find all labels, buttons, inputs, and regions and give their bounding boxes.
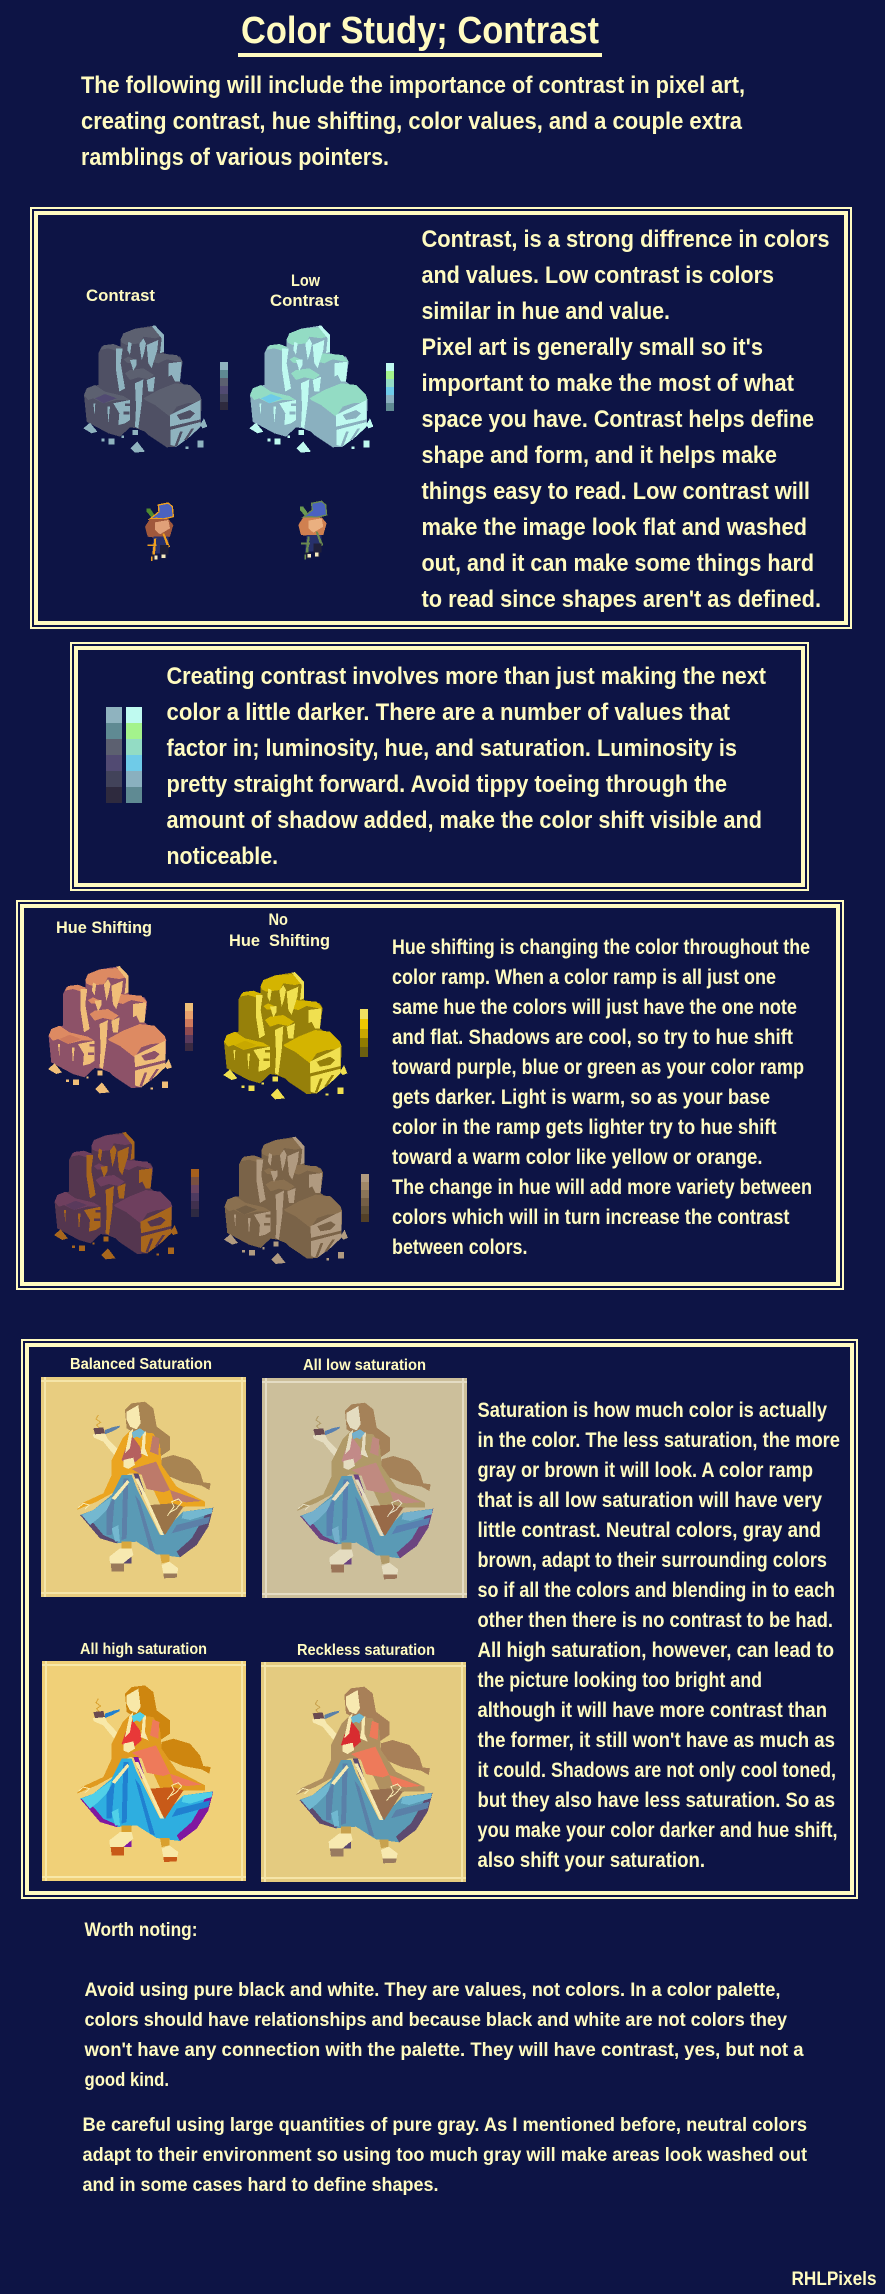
contrast explanation text: out, and it can make some things hard xyxy=(422,550,814,577)
contrast explanation text: Contrast, is a strong diffrence in colors xyxy=(422,226,830,253)
hue shifting text xyxy=(392,936,812,1259)
credit: RHLPixels xyxy=(792,2269,876,2290)
creating contrast text: factor in; luminosity, hue, and saturation. Luminosity is xyxy=(166,735,737,762)
saturation text: other then there is no contrast to be had. xyxy=(478,1609,833,1632)
hue shifting text: color in the ramp gets lighter try to hue shift xyxy=(392,1116,777,1139)
color ramp: no hue shift brown xyxy=(361,1174,369,1222)
saturation text: that is all low saturation will have very xyxy=(478,1489,822,1512)
hue shifting text: gets darker. Light is warm, so as your base xyxy=(392,1086,770,1109)
saturation text: but they also have less saturation. So as xyxy=(478,1789,835,1812)
character: low contrast xyxy=(298,501,327,559)
hue shifting text: color ramp. When a color ramp is all just one xyxy=(392,966,776,989)
hue shifting text: and flat. Shadows are cool, so try to hue shift xyxy=(392,1026,793,1049)
saturation text xyxy=(478,1399,840,1872)
saturation text: also shift your saturation. xyxy=(478,1849,705,1872)
card: balanced saturation xyxy=(41,1377,246,1597)
hue shifting text: toward a warm color like yellow or orange. xyxy=(392,1146,762,1169)
hue shifting text: same hue the colors will just have the one note xyxy=(392,996,797,1019)
note: pure gray: and in some cases hard to define shapes. xyxy=(82,2175,438,2196)
label: reckless saturation: Reckless saturation xyxy=(297,1642,435,1659)
saturation text: although it will have more contrast than xyxy=(478,1699,827,1722)
note: black and white xyxy=(84,1980,804,2091)
creating contrast text: Creating contrast involves more than just making the next xyxy=(166,663,766,690)
contrast explanation text: similar in hue and value. xyxy=(422,298,670,325)
saturation text: in the color. The less saturation, the more xyxy=(478,1429,840,1452)
saturation text: so if all the colors and blending in to each xyxy=(478,1579,835,1602)
rock: low contrast xyxy=(249,325,373,453)
panel: contrast xyxy=(30,207,852,629)
label: low contrast: Contrast xyxy=(270,291,339,310)
rock: no hue shift brown xyxy=(224,1137,348,1264)
creating contrast text: noticeable. xyxy=(166,843,278,870)
note: black and white: colors should have relationships and because black and white are not colors they xyxy=(84,2010,787,2031)
hue shifting text: toward purple, blue or green as your color ramp xyxy=(392,1056,804,1079)
note: pure gray: adapt to their environment so using too much gray will make areas look washed out xyxy=(82,2145,808,2166)
label: all low saturation: All low saturation xyxy=(303,1357,426,1374)
color ramp: low contrast xyxy=(386,363,394,411)
note: black and white: Avoid using pure black and white. They are values, not colors. In a color palette, xyxy=(84,1980,780,2001)
saturation text: Saturation is how much color is actually xyxy=(478,1399,827,1422)
contrast explanation text: things easy to read. Low contrast will xyxy=(422,478,810,505)
contrast explanation text: make the image look flat and washed xyxy=(422,514,807,541)
note: black and white: good kind. xyxy=(84,2070,169,2091)
card: all low saturation xyxy=(262,1378,467,1598)
contrast explanation text: space you have. Contrast helps define xyxy=(422,406,814,433)
creating contrast text xyxy=(166,663,766,870)
saturation text: gray or brown it will look. A color ramp xyxy=(478,1459,813,1482)
hue shifting text: The change in hue will add more variety between xyxy=(392,1176,812,1199)
contrast explanation text: important to make the most of what xyxy=(422,370,794,397)
character: contrast xyxy=(145,503,173,561)
saturation text: brown, adapt to their surrounding colors xyxy=(478,1549,827,1572)
saturation text: the former, it still won't have as much as xyxy=(478,1729,835,1752)
label: all high saturation: All high saturation xyxy=(80,1641,207,1658)
panel: creating contrast xyxy=(70,642,809,891)
color ramp: hue shifted light xyxy=(185,1003,193,1051)
label: hue shifting: Hue Shifting xyxy=(56,918,152,937)
rock: hue shifted dark xyxy=(54,1132,178,1259)
saturation text: All high saturation, however, can lead to xyxy=(478,1639,834,1662)
color ramp: no hue shift yellow xyxy=(360,1009,368,1057)
contrast explanation text: and values. Low contrast is colors xyxy=(422,262,774,289)
label: balanced saturation: Balanced Saturation xyxy=(70,1356,212,1373)
contrast explanation text xyxy=(422,226,830,613)
note: pure gray xyxy=(82,2115,808,2196)
color ramp: contrast xyxy=(220,362,228,410)
rock: contrast xyxy=(83,325,207,453)
intro text block: creating contrast, hue shifting, color values, and a couple extra xyxy=(81,108,743,135)
color ramp: hue shifted dark xyxy=(191,1169,199,1217)
card: reckless saturation xyxy=(261,1662,466,1882)
contrast explanation text: shape and form, and it helps make xyxy=(422,442,777,469)
label: contrast: Contrast xyxy=(86,286,155,305)
title: Color Study; Contrast xyxy=(241,10,599,52)
label: no hue shifting: Hue Shifting xyxy=(229,931,330,950)
panel: saturation xyxy=(21,1339,858,1899)
rock: no hue shift yellow xyxy=(223,972,347,1099)
intro text block xyxy=(81,72,745,171)
intro text block: ramblings of various pointers. xyxy=(81,144,389,171)
panel: hue shifting xyxy=(16,900,844,1290)
creating contrast text: pretty straight forward. Avoid tippy toeing through the xyxy=(166,771,727,798)
creating contrast text: color a little darker. There are a number of values that xyxy=(166,699,730,726)
note: black and white: won't have any connection with the palette. They will have contrast, yes, but not a xyxy=(84,2040,804,2061)
palette swatches xyxy=(106,707,142,803)
label: low contrast xyxy=(270,271,339,310)
label: no hue shifting: No xyxy=(268,910,288,929)
note: pure gray: Be careful using large quantities of pure gray. As I mentioned before, neutral colors xyxy=(82,2115,807,2136)
intro text block: The following will include the importance of contrast in pixel art, xyxy=(81,72,745,99)
saturation text: little contrast. Neutral colors, gray and xyxy=(478,1519,821,1542)
card: all high saturation xyxy=(42,1661,246,1881)
saturation text: the picture looking too bright and xyxy=(478,1669,762,1692)
saturation text: you make your color darker and hue shift, xyxy=(478,1819,838,1842)
creating contrast text: amount of shadow added, make the color shift visible and xyxy=(166,807,762,834)
worth noting heading: Worth noting: xyxy=(84,1920,198,1941)
contrast explanation text: to read since shapes aren't as defined. xyxy=(422,586,821,613)
hue shifting text: between colors. xyxy=(392,1236,528,1259)
rock: hue shifted light xyxy=(48,966,172,1093)
hue shifting text: colors which will in turn increase the contrast xyxy=(392,1206,790,1229)
hue shifting text: Hue shifting is changing the color throughout the xyxy=(392,936,810,959)
contrast explanation text: Pixel art is generally small so it's xyxy=(422,334,763,361)
label: low contrast: Low xyxy=(291,271,321,290)
label: no hue shifting xyxy=(229,910,330,950)
